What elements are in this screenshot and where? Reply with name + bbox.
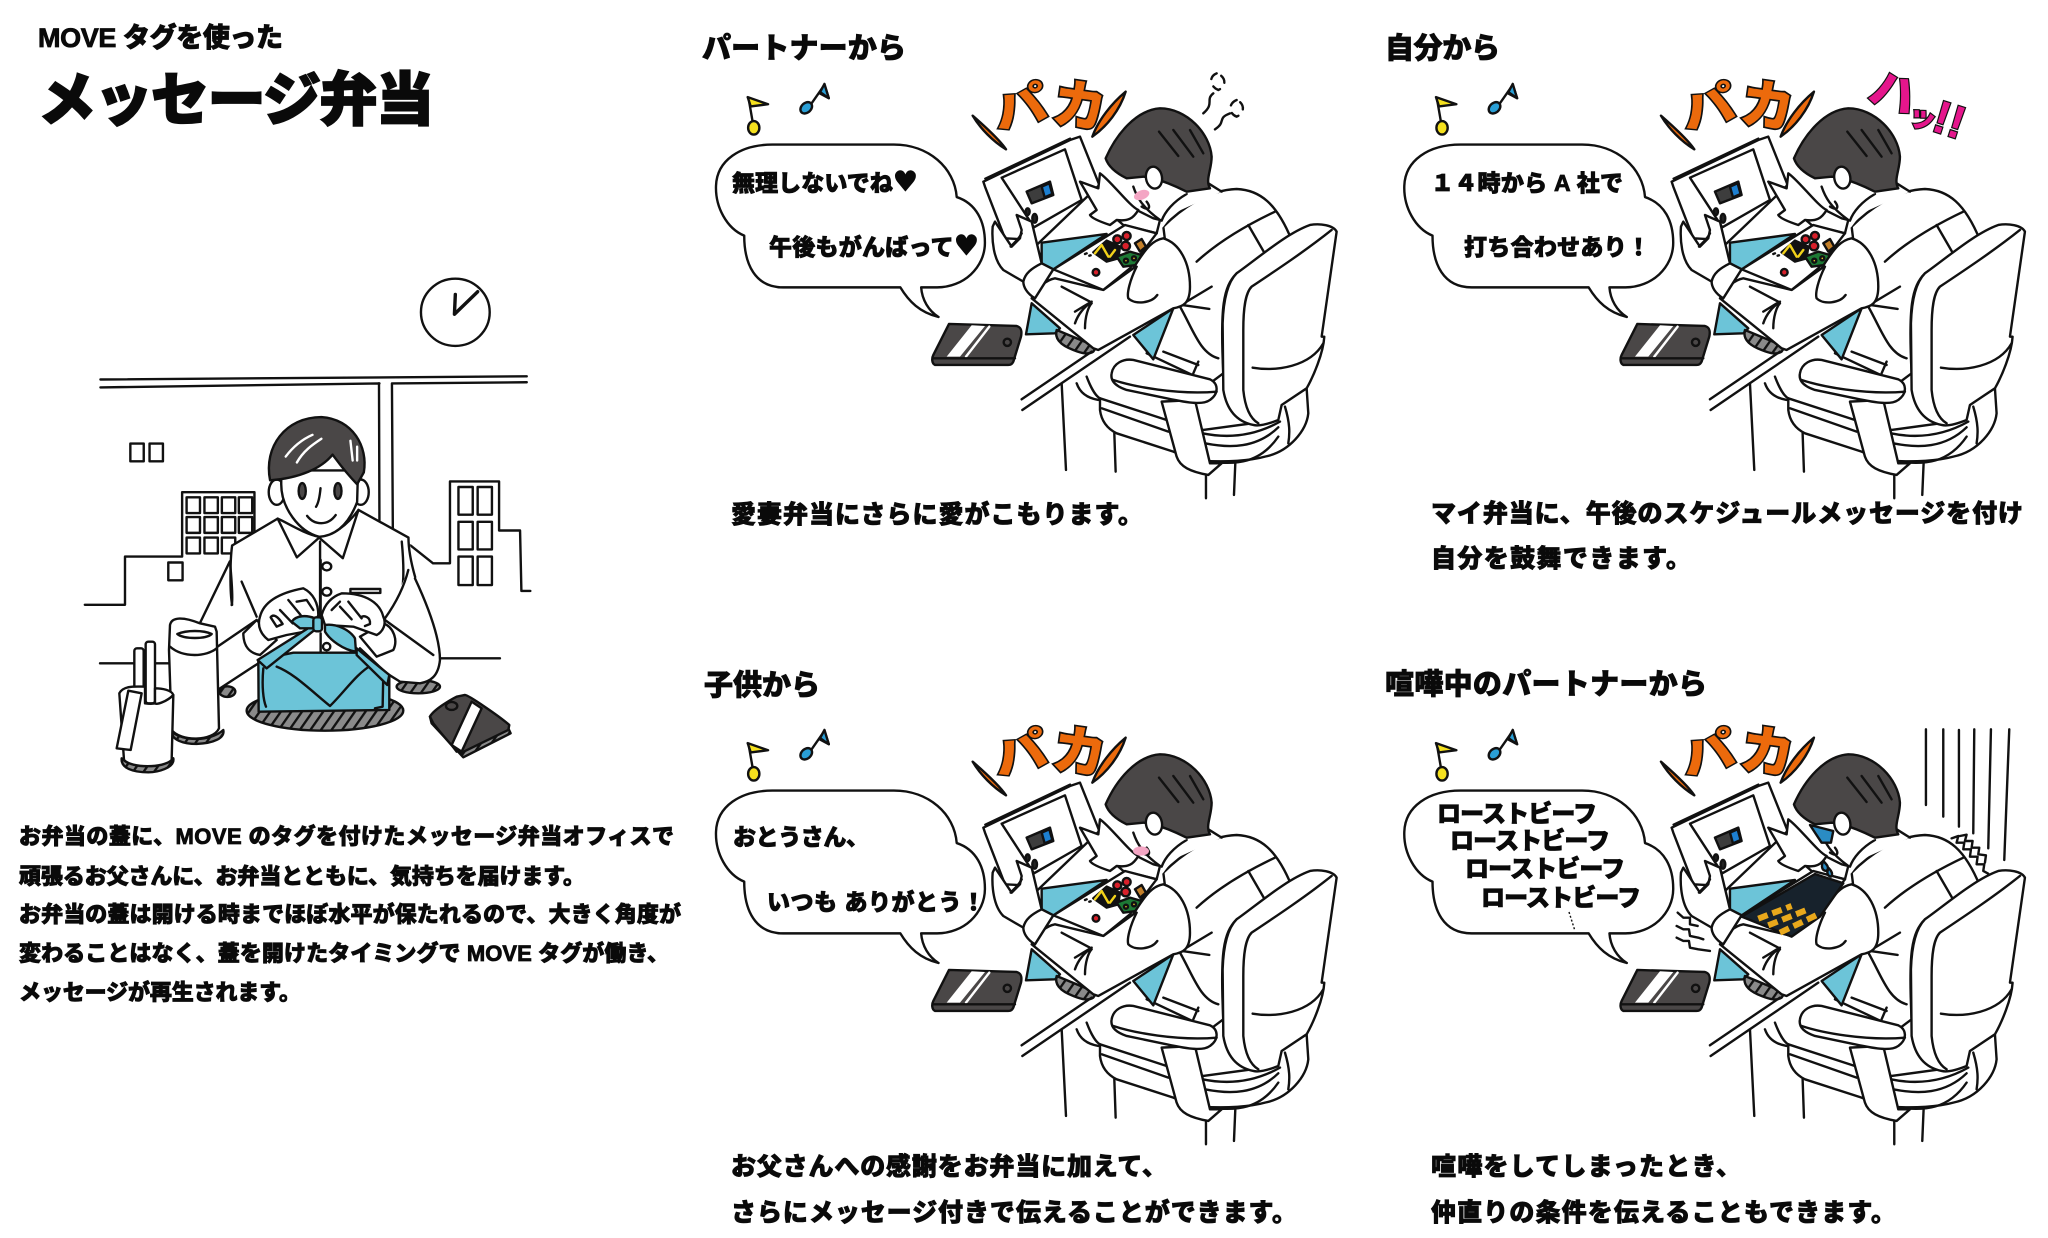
subtitle: MOVE タグを使った [38, 22, 283, 53]
desk, arms, wrapped bento and objects [100, 560, 511, 772]
icon: blush and smile [1133, 846, 1149, 856]
sound effect [1676, 719, 1798, 786]
caption: 愛妻弁当にさらに愛がこもります。 [731, 500, 1143, 529]
illustration: man opening bento [716, 84, 1337, 498]
heading: パートナーから [702, 32, 906, 65]
speech bubble text: ローストビーフ [1465, 855, 1625, 883]
intro text block [19, 824, 681, 1005]
panel: from child [704, 669, 1337, 1227]
panel: from self: 自分を鼓舞できます。 [1431, 545, 1691, 573]
illustration: man opening bento [716, 730, 1337, 1144]
exclamation: !! [1927, 90, 1972, 149]
speech bubble text [732, 165, 979, 262]
sound effect [1676, 73, 1798, 140]
illustration: man wrapping bento at office desk [85, 279, 530, 772]
sound effect: パ [1676, 723, 1741, 786]
sound effect: パ [1676, 77, 1741, 140]
title [38, 22, 434, 133]
speech bubble text: ローストビーフ [1481, 884, 1641, 912]
exclamation: ハ [1863, 61, 1924, 125]
panel: from partner during a fight: 仲直りの条件を伝えることもできます。 [1431, 1199, 1896, 1227]
heading: 子供から [704, 669, 820, 702]
panel: from child: さらにメッセージ付きで伝えることができます。 [731, 1198, 1297, 1227]
sound effect [988, 73, 1110, 140]
exclamation [1863, 61, 1972, 149]
clock [421, 279, 490, 346]
sound effect: パ [988, 723, 1053, 786]
intro text block: メッセージが再生されます。 [19, 980, 301, 1005]
sound effect: パ [988, 77, 1053, 140]
intro text block: 頑張るお父さんに、お弁当とともに、気持ちを届けます。 [19, 864, 585, 889]
sound effect: カ [1736, 73, 1798, 140]
speech bubble text: 無理しないでね♥ [732, 165, 918, 198]
speech bubble trailing dots [1569, 912, 1575, 931]
heading: 自分から [1385, 32, 1500, 65]
speech bubble text: 打ち合わせあり！ [1464, 234, 1650, 260]
speech bubble text [1437, 800, 1641, 912]
sound effect: カ [1048, 719, 1110, 786]
illustration: man opening bento [1404, 730, 2025, 1144]
intro text block: お弁当の蓋は開ける時までほぼ水平が保たれるので、大きく角度が [19, 902, 681, 927]
speech bubble text: おとうさん、 [733, 824, 869, 850]
office background [85, 376, 530, 605]
speech bubble text [1431, 170, 1650, 260]
caption: マイ弁当に、午後のスケジュールメッセージを付け [1431, 499, 2023, 528]
heading: 喧嘩中のパートナーから [1385, 668, 1707, 701]
sound effect [988, 719, 1110, 786]
speech bubble text [733, 824, 985, 915]
caption: 喧嘩をしてしまったとき、 [1431, 1153, 1741, 1181]
intro text block: お弁当の蓋に、MOVE のタグを付けたメッセージ弁当オフィスで [19, 824, 674, 849]
icon: sigh puffs and blush [1133, 73, 1243, 202]
panel: from partner during a fight [1385, 668, 2025, 1227]
exclamation: ッ [1904, 99, 1941, 137]
illustration: man opening bento [1404, 84, 2025, 498]
sound effect: カ [1048, 73, 1110, 140]
panel: from partner [702, 32, 1337, 529]
panel: from self [1385, 32, 2025, 573]
man upper body [192, 417, 440, 648]
speech bubble text: ローストビーフ [1450, 827, 1610, 855]
speech bubble text: ローストビーフ [1437, 800, 1597, 828]
speech bubble text: いつも ありがとう！ [767, 889, 985, 915]
main heading: メッセージ弁当 [38, 68, 434, 133]
sound effect: カ [1736, 719, 1798, 786]
overlay: dark bento, sweat, shock lines [1677, 729, 2009, 951]
speech bubble text: 午後もがんばって♥ [769, 229, 979, 262]
caption: お父さんへの感謝をお弁当に加えて、 [731, 1152, 1167, 1181]
intro text block: 変わることはなく、蓋を開けたタイミングで MOVE タグが働き、 [19, 941, 669, 966]
speech bubble text: １４時から A 社で [1431, 170, 1623, 196]
